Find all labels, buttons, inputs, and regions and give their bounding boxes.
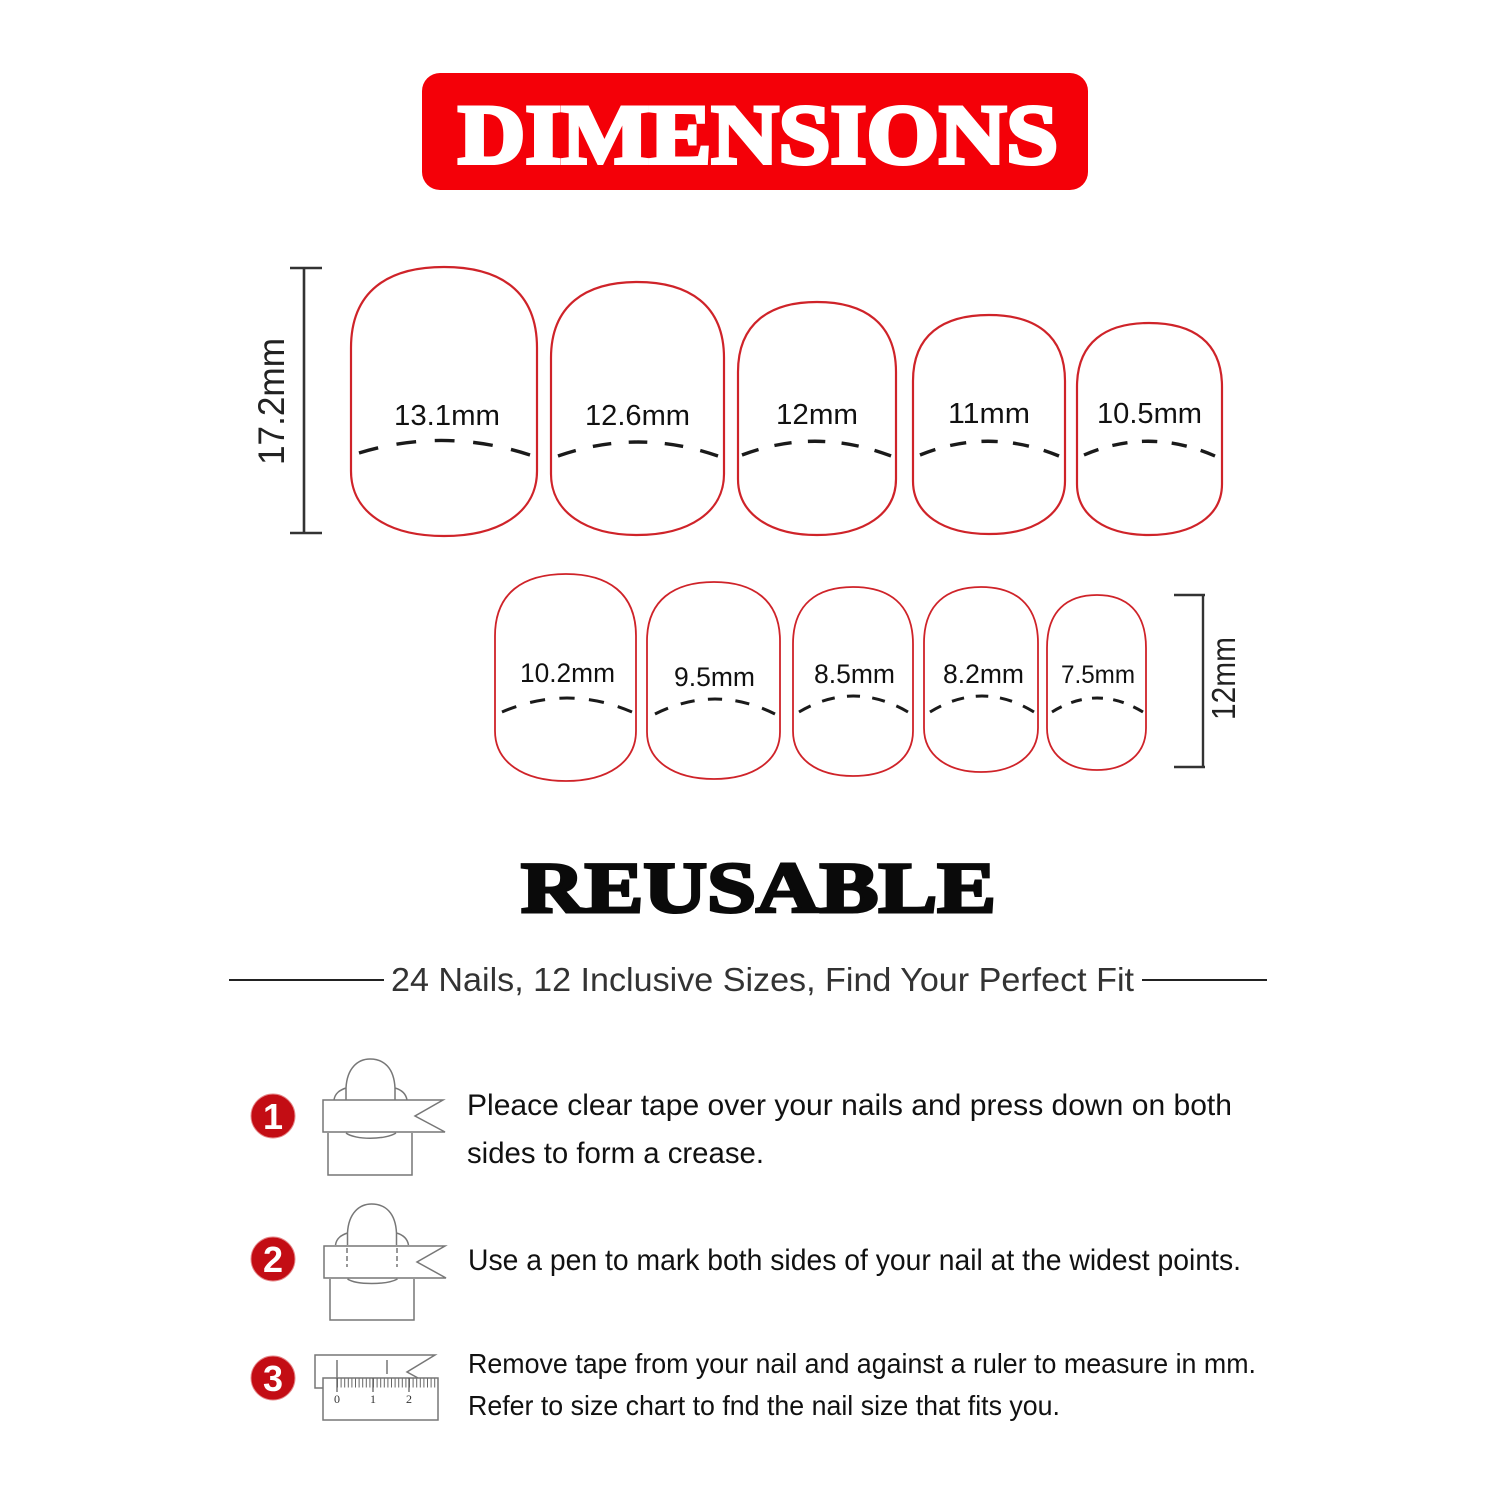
icon: tape against ruler: 1 bbox=[370, 1392, 376, 1406]
nail: 13.1mm: 13.1mm bbox=[394, 400, 500, 432]
height bracket: 12mm bbox=[1174, 595, 1242, 767]
height bracket: 17.2mm bbox=[251, 268, 322, 534]
step 2 bbox=[251, 1204, 1241, 1320]
badge: 3: 3 bbox=[263, 1358, 283, 1399]
nail: 12mm bbox=[738, 302, 896, 535]
step 1 text: Pleace clear tape over your nails and press down on both bbox=[467, 1089, 1232, 1122]
nail: 8.2mm bbox=[924, 587, 1038, 772]
badge: 1: 1 bbox=[263, 1096, 283, 1137]
icon: tape over nail bbox=[323, 1059, 445, 1175]
icon: pen marks on tape bbox=[324, 1204, 446, 1320]
nail: 12mm: 12mm bbox=[776, 399, 858, 431]
badge: 2: 2 bbox=[263, 1239, 283, 1280]
icon: tape against ruler: 0 bbox=[334, 1392, 340, 1406]
nail: 9.5mm bbox=[647, 582, 780, 779]
step 3 text bbox=[468, 1348, 1256, 1421]
nail row: small sizes bbox=[495, 574, 1146, 781]
badge: 1 bbox=[251, 1094, 295, 1138]
step 3 bbox=[251, 1348, 1256, 1421]
nail: 10.2mm bbox=[495, 574, 636, 781]
nail: 12.6mm bbox=[551, 282, 724, 535]
step 1 text: sides to form a crease. bbox=[467, 1137, 764, 1170]
nail: 9.5mm: 9.5mm bbox=[674, 662, 755, 692]
nail: 10.5mm bbox=[1077, 323, 1222, 535]
heading: reusable: REUSABLE bbox=[521, 848, 996, 928]
nail: 7.5mm: 7.5mm bbox=[1061, 661, 1135, 689]
step 3 text: Refer to size chart to fnd the nail size that fits you. bbox=[468, 1390, 1060, 1421]
nail: 11mm bbox=[913, 315, 1065, 534]
height bracket: 12mm: 12mm bbox=[1205, 637, 1242, 720]
step 1 text bbox=[467, 1089, 1232, 1170]
title banner: dimensions: DIMENSIONS bbox=[458, 88, 1058, 182]
badge: 3 bbox=[251, 1356, 295, 1400]
nail: 13.1mm bbox=[351, 267, 537, 536]
nail: 10.2mm: 10.2mm bbox=[520, 658, 615, 688]
subtitle with rules: 24 Nails, 12 Inclusive Sizes, Find Your Perfect Fit bbox=[391, 961, 1134, 998]
icon: tape against ruler: 2 bbox=[406, 1392, 412, 1406]
nail: 8.5mm: 8.5mm bbox=[814, 659, 895, 689]
nail: 7.5mm bbox=[1047, 595, 1146, 770]
step 1 bbox=[251, 1059, 1232, 1175]
title banner: dimensions bbox=[422, 73, 1088, 190]
nail: 11mm: 11mm bbox=[948, 398, 1030, 430]
nail: 8.5mm bbox=[793, 587, 913, 776]
nail: 8.2mm: 8.2mm bbox=[943, 659, 1024, 689]
icon: tape against ruler bbox=[315, 1355, 438, 1420]
badge: 2 bbox=[251, 1237, 295, 1281]
step 3 text: Remove tape from your nail and against a ruler to measure in mm. bbox=[468, 1348, 1256, 1379]
nail: 10.5mm: 10.5mm bbox=[1097, 398, 1202, 430]
nail: 12.6mm: 12.6mm bbox=[585, 400, 690, 432]
height bracket: 17.2mm: 17.2mm bbox=[251, 338, 292, 465]
step 2 text: Use a pen to mark both sides of your nail at the widest points. bbox=[468, 1244, 1241, 1277]
nail row: large sizes bbox=[351, 267, 1222, 536]
